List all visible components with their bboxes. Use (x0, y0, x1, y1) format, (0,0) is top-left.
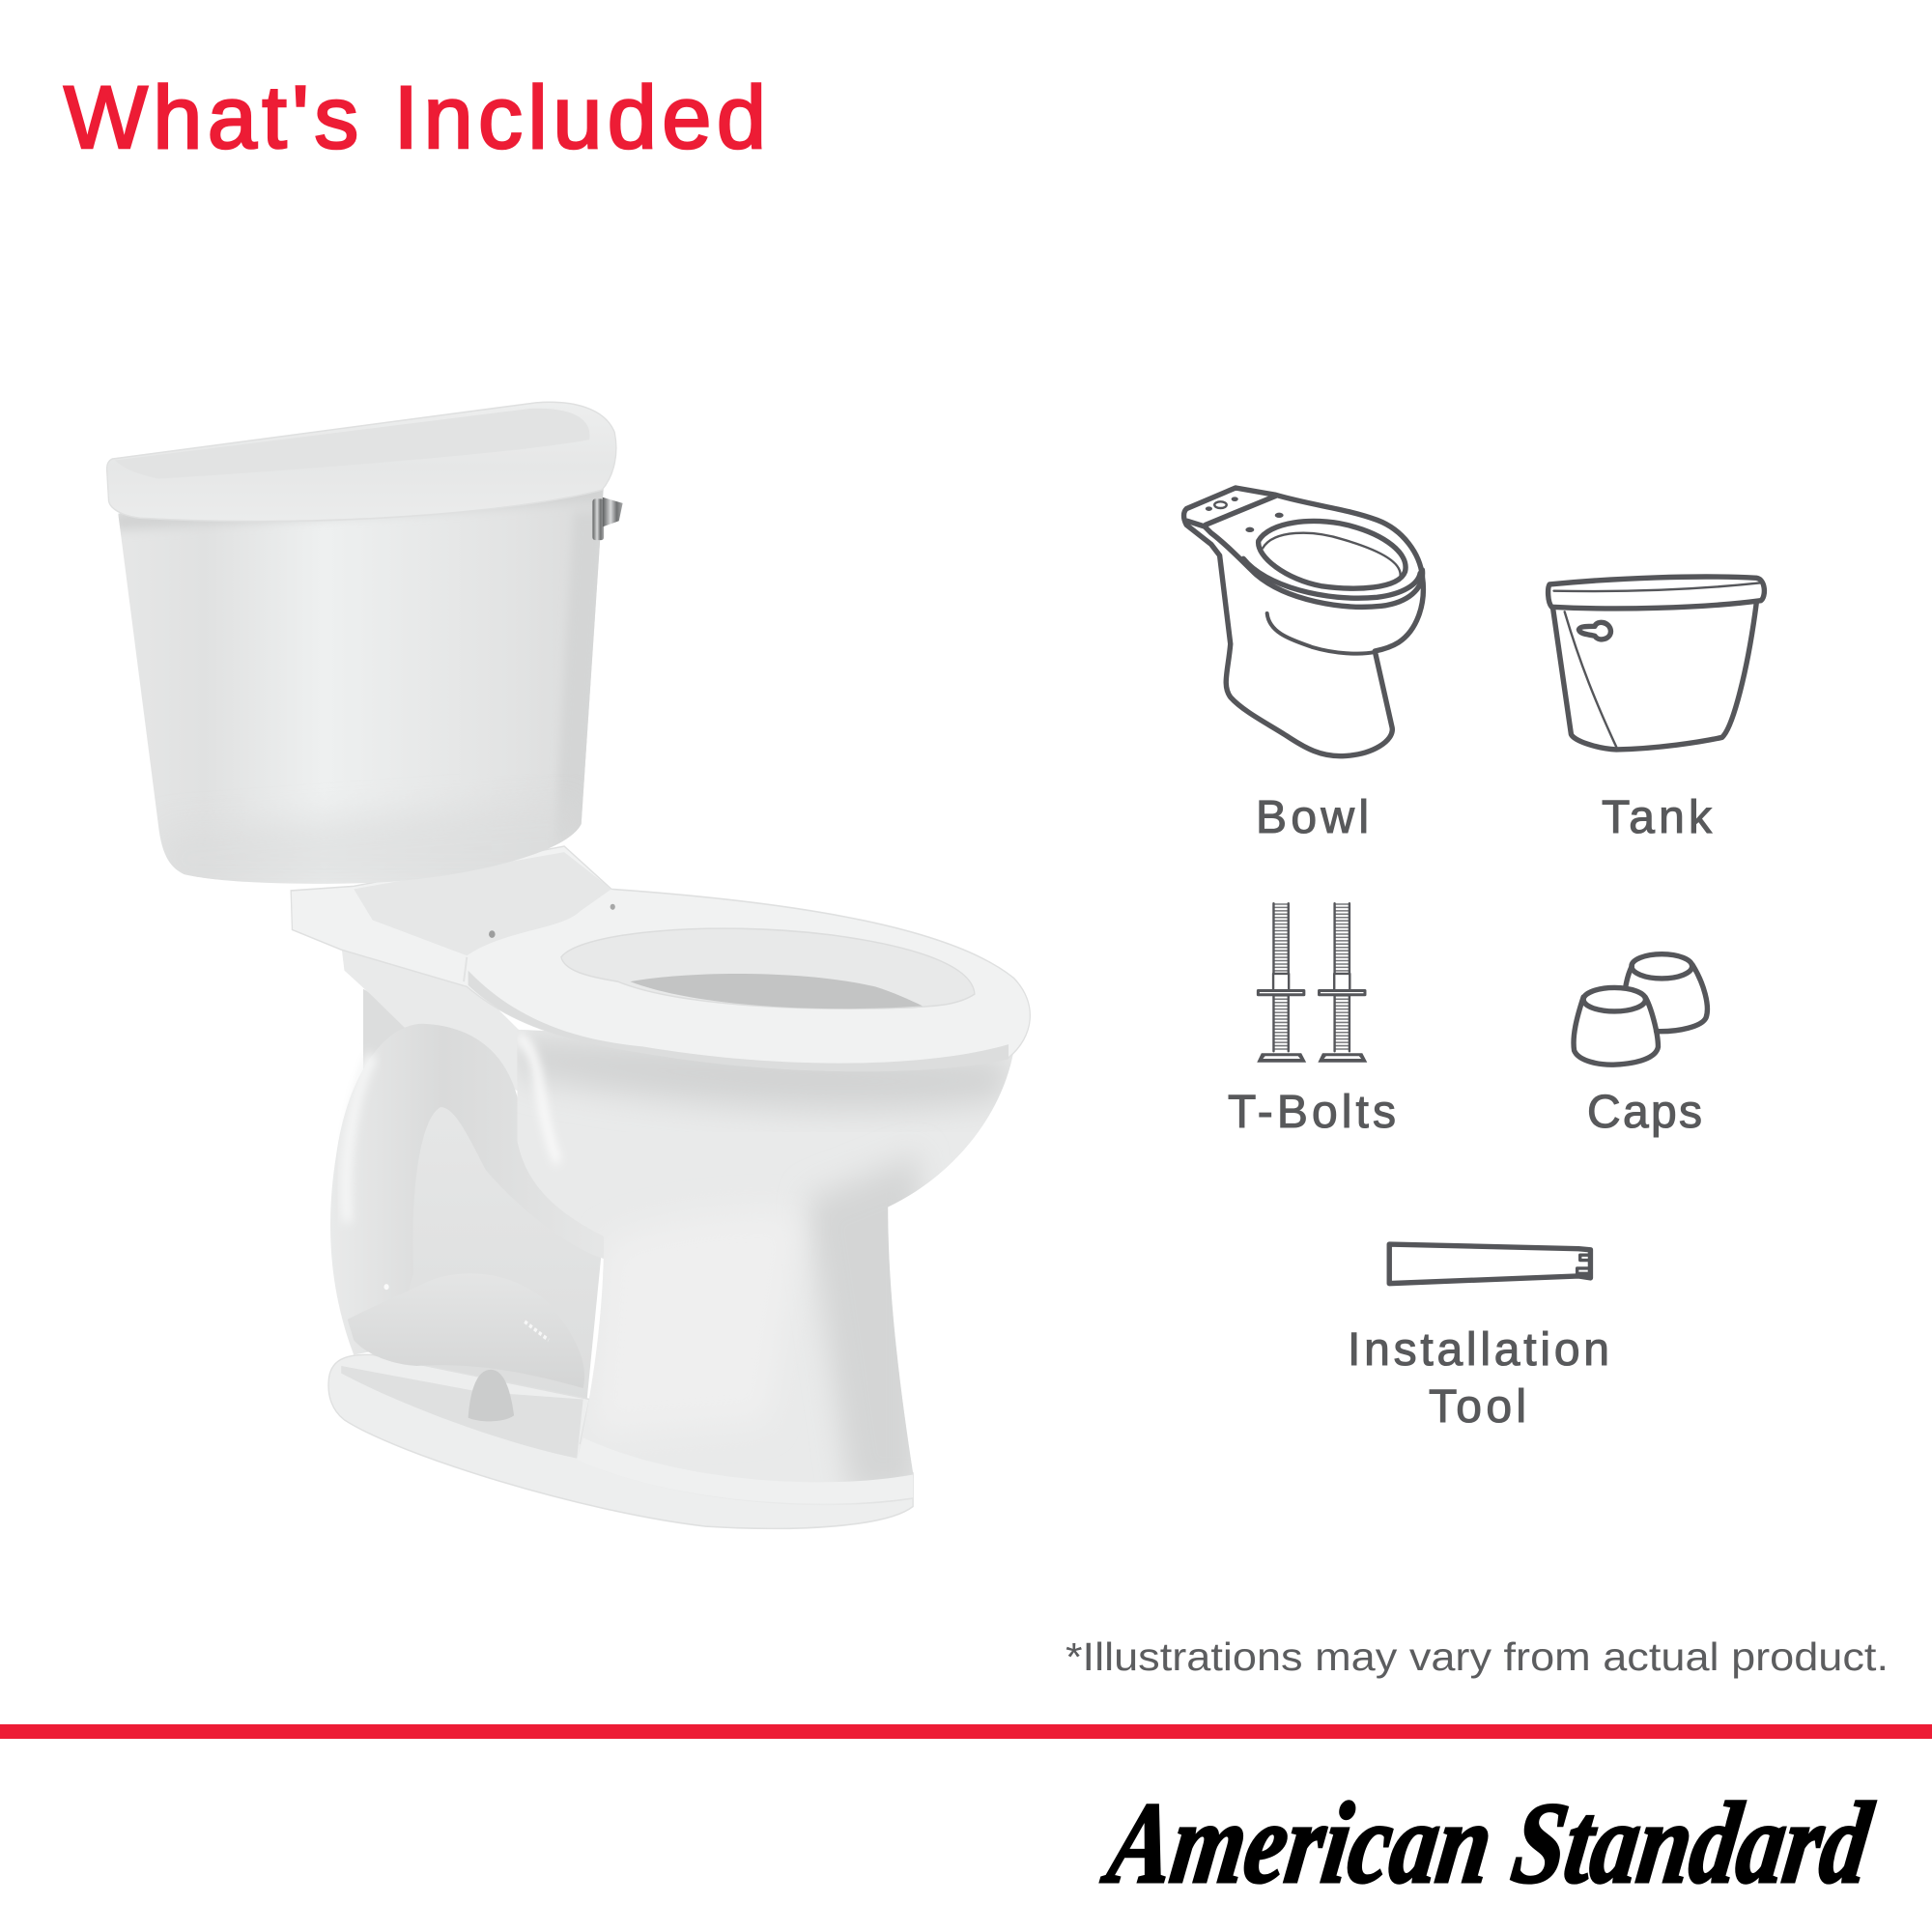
trapway arch (330, 1024, 611, 1355)
bowl and pedestal body (518, 1030, 1012, 1504)
lower trap pipe (348, 1273, 584, 1388)
icon: tank (1548, 577, 1764, 750)
label: Installation Tool (1348, 1324, 1609, 1433)
label: Caps: Caps (1587, 1087, 1702, 1138)
tank-mount deck and rim (291, 846, 1030, 1070)
interior shaded area (373, 1089, 602, 1406)
icon: t-bolts (1257, 903, 1367, 1063)
label: T-Bolts: T-Bolts (1228, 1087, 1396, 1138)
icon: installation tool (1389, 1244, 1590, 1284)
bowl opening (561, 928, 975, 1009)
neck under deck (341, 945, 529, 1096)
water well (630, 974, 923, 1009)
flush handle (592, 497, 623, 540)
red divider bar (0, 1724, 1932, 1739)
footnote: *Illustrations may vary from actual product. (1065, 1634, 1889, 1679)
bolt cap (469, 1370, 514, 1421)
icon: caps (1574, 954, 1707, 1065)
tank body (115, 475, 611, 889)
title: What's Included (64, 69, 766, 167)
label: Installation Tool: Tool (1429, 1381, 1526, 1433)
label: Installation Tool: Installation (1348, 1324, 1609, 1376)
tank lid (107, 402, 616, 522)
back wall strip (363, 989, 411, 1085)
icon: bowl (1184, 488, 1423, 756)
product photo: two-piece toilet (107, 402, 1030, 1532)
label: Bowl: Bowl (1256, 792, 1369, 843)
label: Tank: Tank (1602, 792, 1713, 843)
base foot (328, 1354, 913, 1528)
